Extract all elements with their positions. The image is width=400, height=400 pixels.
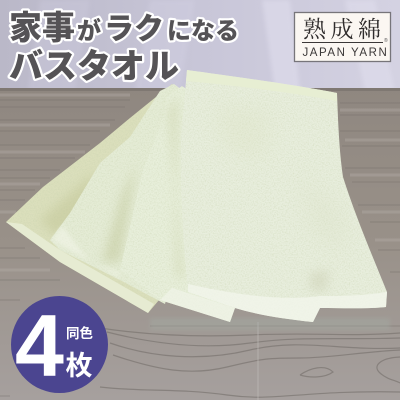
background: wood floor — [0, 88, 400, 400]
towel 1 (bottom left) — [6, 84, 178, 313]
numeral 4: 4 — [15, 296, 64, 395]
towel 4 (top) — [181, 70, 387, 322]
logo: 熟成綿 JAPAN YARN: 熟成綿 — [303, 17, 386, 42]
logo: 熟成綿 JAPAN YARN: JAPAN YARN — [302, 47, 388, 59]
title — [9, 9, 239, 86]
badge: same colour, 4 pieces — [11, 296, 108, 395]
label 枚: 枚 — [66, 351, 92, 381]
towel 2 — [50, 84, 182, 304]
title line 2: バスタオル — [9, 48, 179, 86]
logo: 熟成綿 JAPAN YARN — [294, 12, 390, 62]
logo: 熟成綿 JAPAN YARN: ® — [384, 37, 388, 44]
towel stack — [6, 70, 387, 322]
background: lavender wall — [0, 0, 400, 92]
towel 3 — [120, 86, 235, 322]
title line 1: 家事がラクになる — [9, 9, 239, 46]
label 同色: 同色 — [66, 325, 93, 341]
